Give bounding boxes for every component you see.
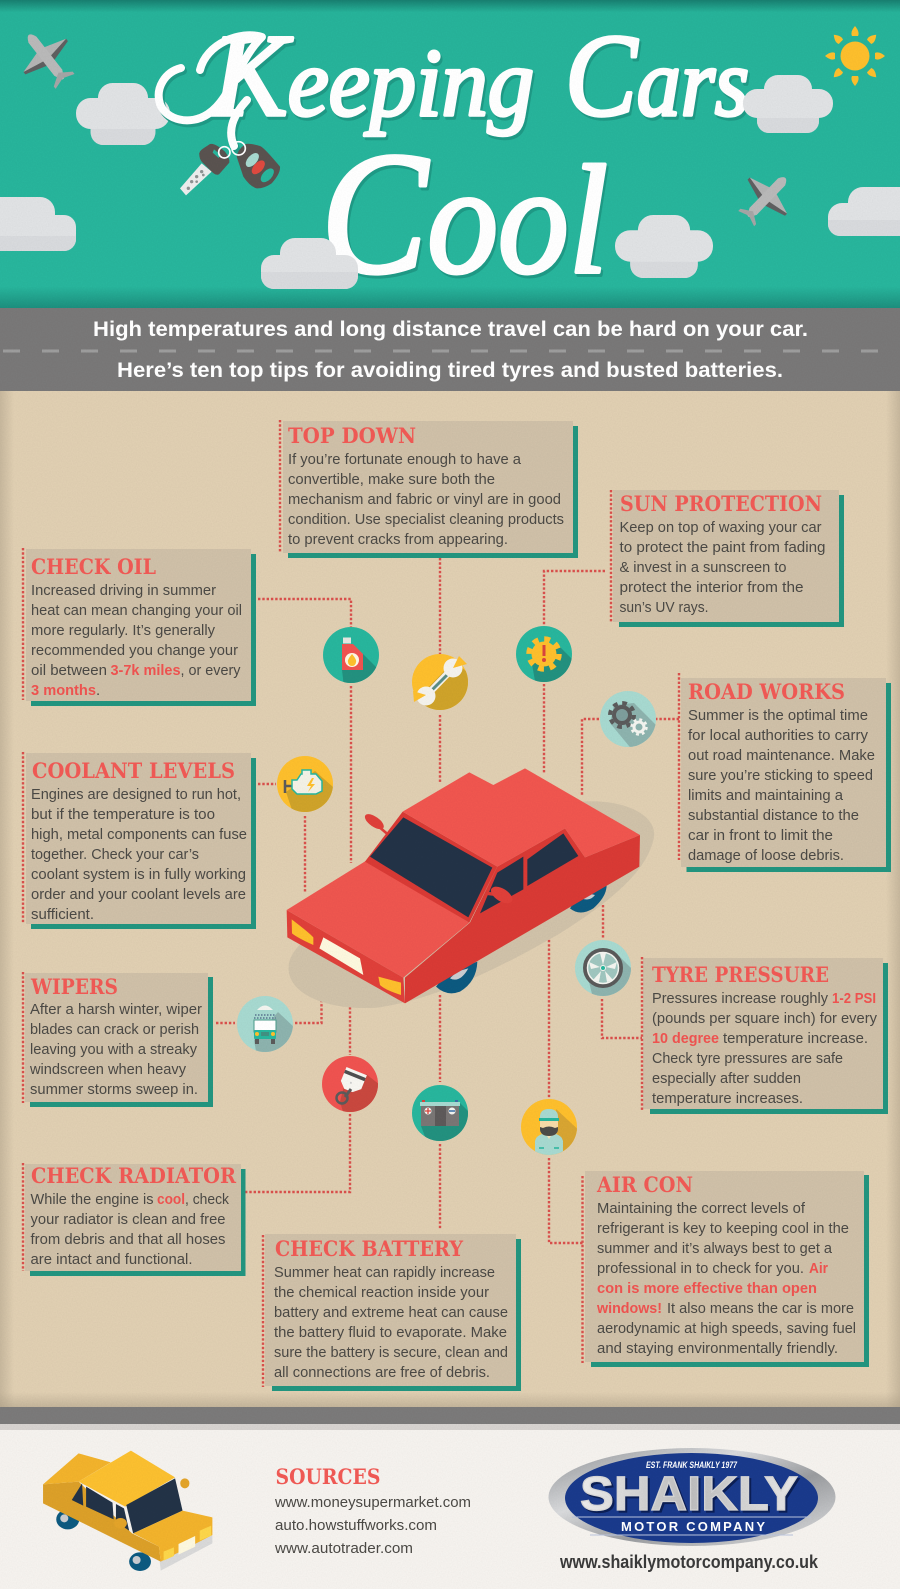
text: top down: to prevent cracks from appearing. [288, 531, 508, 548]
text: coolant levels: coolant system is in fully working [31, 866, 246, 883]
illustration: red car [287, 768, 654, 1008]
text: road works: substantial distance to the [688, 807, 859, 824]
text: tyre pressure: (pounds per square inch) for every [652, 1010, 877, 1027]
panel: road works [679, 673, 891, 872]
source links: www.autotrader.com [274, 1540, 413, 1557]
icon: plane right [727, 160, 804, 237]
roof and trunk [403, 768, 640, 867]
hood and front [133, 1511, 212, 1562]
icon: sun [825, 26, 885, 86]
icon: oil can [323, 627, 379, 683]
icon: car keys [180, 142, 280, 195]
text: check battery: battery and extreme heat can cause [274, 1304, 508, 1321]
side windows [72, 1483, 129, 1531]
front wheel [436, 962, 477, 993]
text: top down [288, 451, 564, 548]
icon: plane top left [7, 18, 86, 98]
text: check oil: . [96, 682, 100, 699]
text: air con: Maintaining the correct levels of [597, 1200, 806, 1217]
text: sun protection: sun’s UV rays. [620, 599, 708, 616]
text: air con: professional in to check for you. [597, 1260, 804, 1277]
text: top down: convertible, make sure both the [288, 471, 495, 488]
cloud: left edge [0, 197, 76, 251]
footer background [0, 1407, 900, 1589]
heading: check battery: CHECK BATTERY [275, 1236, 464, 1261]
heading: sources: SOURCES [276, 1464, 380, 1489]
heading: coolant levels: COOLANT LEVELS [32, 758, 235, 783]
icon: warning gear [516, 626, 572, 682]
connector: check radiator [245, 977, 350, 1192]
text: check radiator: are intact and functional. [30, 1251, 192, 1268]
panel: check radiator [23, 1163, 246, 1276]
text: air con: refrigerant is key to keeping cool in the [597, 1220, 849, 1237]
text: wipers: summer storms sweep in. [30, 1081, 198, 1098]
mirrors [362, 811, 515, 907]
text: sun protection: to protect the paint from fading [620, 539, 826, 556]
connector: top down [439, 558, 441, 783]
title: keeping cars cool [159, 10, 749, 310]
text: air con: aerodynamic at high speeds, saving fuel [597, 1320, 856, 1337]
text: check radiator: While the engine is [30, 1191, 154, 1208]
car side [43, 1482, 161, 1562]
heading: sun protection: SUN PROTECTION [620, 491, 822, 516]
cloud over title [261, 238, 358, 289]
text: tyre pressure [652, 990, 877, 1107]
source links: www.moneysupermarket.com [274, 1494, 471, 1511]
tail of the K leading to the keys [231, 100, 247, 146]
cloud [615, 215, 713, 278]
side windows [480, 833, 578, 913]
text: check radiator: from debris and that all hoses [30, 1231, 226, 1248]
car shadow [289, 801, 654, 1008]
source links [274, 1494, 471, 1557]
text: road works: Summer is the optimal time [688, 707, 868, 724]
text: coolant levels: sufficient. [31, 906, 94, 923]
text: coolant levels: Engines are designed to run hot, [31, 786, 241, 803]
title line: cars: Cars [565, 10, 749, 141]
text: wipers: After a harsh winter, wiper [30, 1001, 202, 1018]
text: coolant levels: high, metal components can fuse [31, 826, 247, 843]
cloud over title [743, 75, 833, 133]
text: coolant levels: order and your coolant levels are [31, 886, 246, 903]
text: tyre pressure: temperature increases. [652, 1090, 803, 1107]
icon: tyre [575, 940, 631, 996]
website url: www.shaiklymotorcompany.co.uk [559, 1552, 819, 1572]
intro line 2: Here’s ten top tips for avoiding tired tyres and busted batteries. [117, 359, 783, 382]
text: check battery: the chemical reaction inside your [274, 1284, 489, 1301]
rear wheel [570, 885, 607, 912]
panel: wipers [23, 972, 213, 1107]
grille [179, 1536, 195, 1555]
roof [79, 1451, 175, 1507]
logo: shaikly motor company [548, 1448, 836, 1546]
text: check battery: sure the battery is secure, clean and [274, 1344, 508, 1361]
text: tyre pressure: Pressures increase roughly [652, 990, 828, 1007]
text: check oil: heat can mean changing your oil [31, 602, 242, 619]
header sky background [0, 0, 900, 308]
text: check oil: , or every [180, 662, 241, 679]
trunk [43, 1453, 111, 1484]
text: sun protection: & invest in a sunscreen to [620, 559, 786, 576]
text: check battery [274, 1264, 508, 1381]
mirrors [114, 1478, 189, 1529]
text: wipers: leaving you with a streaky [30, 1041, 197, 1058]
cloud: right edge [828, 187, 900, 236]
road banner [0, 308, 900, 391]
connector: check oil [258, 599, 351, 863]
car side [405, 828, 640, 1003]
heading: road works: ROAD WORKS [688, 679, 845, 704]
text: road works: car in front to limit the [688, 827, 833, 844]
text: check oil: oil between [31, 662, 107, 679]
icon: wiper truck [237, 996, 293, 1052]
panel: top down [280, 420, 578, 558]
text: air con: windows! [596, 1300, 662, 1317]
connector: coolant levels [258, 784, 305, 893]
text: check oil: recommended you change your [31, 642, 238, 659]
hood [287, 861, 469, 978]
heading: tyre pressure: TYRE PRESSURE [652, 962, 829, 987]
text: sun protection: protect the interior from the [620, 579, 804, 596]
icon: piston [322, 1056, 378, 1112]
text: tyre pressure: temperature increase. [723, 1030, 868, 1047]
main tan background [0, 391, 900, 1407]
lights [164, 1526, 211, 1561]
logo: shaikly motor company: EST. FRANK SHAIKLY 1977 [646, 1460, 738, 1470]
text: air con: and staying environmentally friendly. [597, 1340, 838, 1357]
text: air con: summer and it’s always best to get a [597, 1240, 833, 1257]
text: air con: Air [809, 1260, 828, 1277]
intro line 1: High temperatures and long distance travel can be hard on your car. [93, 318, 808, 341]
text: air con [596, 1200, 856, 1357]
title line: cool: Cool [321, 116, 608, 310]
text: check radiator: , check [185, 1191, 229, 1208]
text: top down: If you’re fortunate enough to have a [288, 451, 522, 468]
heading: wipers: WIPERS [30, 974, 118, 999]
headlights [292, 919, 401, 995]
windscreen [370, 817, 492, 917]
cloud [76, 83, 170, 145]
text: road works: out road maintenance. Make [688, 747, 875, 764]
text: top down: condition. Use specialist cleaning products [288, 511, 564, 528]
title line: keeping: Keeping [210, 10, 534, 141]
heading: top down: TOP DOWN [288, 423, 416, 448]
text: air con: con is more effective than open [597, 1280, 817, 1297]
heading: air con: AIR CON [596, 1172, 693, 1197]
connector: check battery [439, 995, 441, 1230]
text: coolant levels: together. Check your car’s [31, 846, 199, 863]
logo: shaikly motor company: SHAIKLY [580, 1468, 798, 1521]
icon: engine [277, 756, 333, 812]
text: road works: for local authorities to carry [688, 727, 868, 744]
car front [287, 910, 405, 1003]
text: tyre pressure: Check tyre pressures are safe [652, 1050, 843, 1067]
text: tyre pressure: 1-2 PSI [832, 990, 876, 1007]
panel: coolant levels [23, 752, 256, 929]
text: top down: mechanism and fabric or vinyl are in good [288, 491, 561, 508]
connector: wipers [216, 962, 322, 1023]
logo: shaikly motor company: MOTOR COMPANY [621, 1519, 765, 1534]
wheels [56, 1509, 151, 1571]
windscreen frame [365, 812, 497, 923]
icon: gears [600, 691, 656, 747]
swash of the K [159, 35, 262, 120]
text: check oil: 3 months [31, 682, 96, 699]
illustration: yellow car [43, 1451, 212, 1571]
icon: wrench [412, 654, 468, 710]
heading: check radiator: CHECK RADIATOR [31, 1163, 236, 1188]
text: road works: damage of loose debris. [688, 847, 844, 864]
icon: battery [412, 1085, 468, 1141]
sources [274, 1464, 471, 1557]
icon: mechanic [521, 1099, 577, 1155]
text: tyre pressure: especially after sudden [652, 1070, 801, 1087]
windscreen [126, 1478, 183, 1533]
text: sun protection [620, 519, 826, 616]
text: wipers: windscreen when heavy [29, 1061, 186, 1078]
text: check battery: Summer heat can rapidly increase [274, 1264, 495, 1281]
text: wipers: blades can crack or perish [30, 1021, 199, 1038]
source links: auto.howstuffworks.com [275, 1517, 437, 1534]
panel: tyre pressure [642, 957, 888, 1114]
text: road works [688, 707, 875, 864]
text: coolant levels [31, 786, 247, 923]
connector: sun protection [544, 571, 605, 773]
text: road works: limits and maintaining a [688, 787, 844, 804]
text: check battery: the battery fluid to evaporate. Make [274, 1324, 507, 1341]
text: check radiator: cool [157, 1191, 185, 1208]
panel: check oil [23, 548, 256, 706]
text: tyre pressure: 10 degree [652, 1030, 719, 1047]
text: air con: It also means the car is more [667, 1300, 854, 1317]
grille [319, 937, 363, 975]
text: check radiator [30, 1191, 229, 1268]
connector: air con [549, 927, 583, 1243]
text: check oil [31, 582, 242, 699]
text: check oil: more regularly. It’s generally [31, 622, 215, 639]
connector: tyre pressure [602, 905, 642, 1038]
text: check battery: all connections are free of debris. [274, 1364, 490, 1381]
text: check oil: 3-7k miles [110, 662, 180, 679]
panel: check battery [263, 1234, 521, 1391]
panel: air con [582, 1171, 869, 1367]
text: check radiator: your radiator is clean and free [30, 1211, 226, 1228]
connector: road works [582, 719, 679, 795]
chassis strip [160, 1535, 212, 1571]
text: coolant levels: but if the temperature is too [31, 806, 215, 823]
text: wipers [29, 1001, 202, 1098]
wheel hubs [60, 1514, 141, 1564]
text: check oil: Increased driving in summer [31, 582, 216, 599]
panel: sun protection [611, 490, 844, 627]
heading: check oil: CHECK OIL [31, 554, 156, 579]
text: sun protection: Keep on top of waxing your car [620, 519, 822, 536]
text: road works: sure you’re sticking to speed [688, 767, 873, 784]
